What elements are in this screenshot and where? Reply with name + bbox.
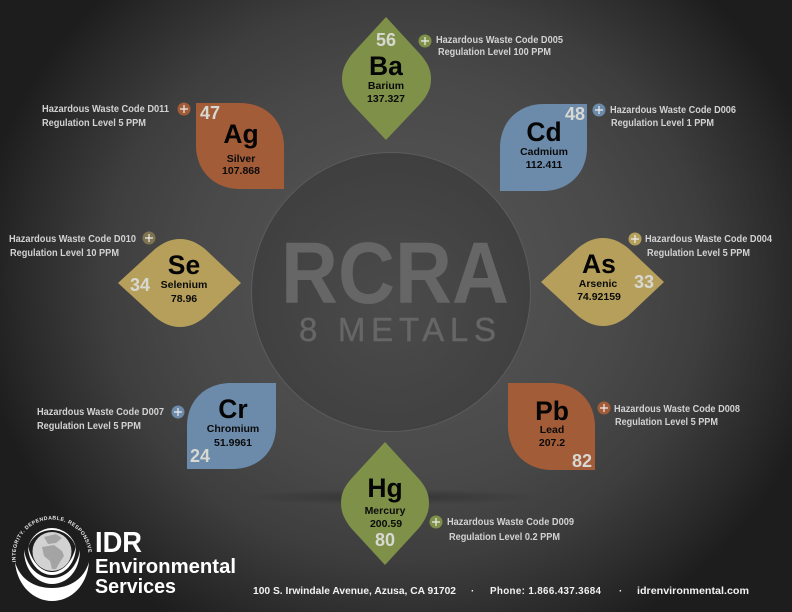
callout: Selenium regulation: Regulation Level 10 PPM bbox=[10, 248, 119, 259]
callout: Barium regulation: Hazardous Waste Code D005 bbox=[436, 35, 563, 46]
element: Silver: Ag bbox=[223, 119, 259, 149]
callout: Barium regulation bbox=[418, 34, 563, 58]
element: Chromium: Cr bbox=[218, 394, 248, 424]
callout: Lead regulation: Hazardous Waste Code D008 bbox=[614, 404, 740, 415]
callout: Cadmium regulation bbox=[592, 104, 736, 129]
element: Lead: Lead bbox=[540, 424, 564, 436]
element: Mercury bbox=[341, 442, 429, 565]
logo wordmark: Environmental bbox=[95, 556, 236, 578]
callout: Chromium regulation bbox=[37, 406, 184, 432]
callout: Silver regulation: Regulation Level 5 PPM bbox=[42, 118, 146, 129]
element: Lead: 207.2 bbox=[539, 437, 565, 449]
element: Lead: Pb bbox=[535, 396, 569, 426]
element: Mercury: Hg bbox=[367, 473, 403, 503]
element: Arsenic: 33 bbox=[634, 272, 654, 292]
callout: Mercury regulation: Hazardous Waste Code D009 bbox=[447, 517, 574, 528]
element: Barium: Barium bbox=[368, 80, 404, 92]
element: Chromium: Chromium bbox=[207, 423, 259, 435]
central circle: RCRA 8 Metals bbox=[252, 152, 530, 432]
callout: Arsenic regulation: Regulation Level 5 PPM bbox=[647, 248, 750, 259]
element: Cadmium: Cadmium bbox=[520, 146, 568, 158]
callout: Arsenic regulation bbox=[628, 232, 772, 259]
callout: Silver regulation bbox=[42, 102, 190, 129]
element: Mercury: Mercury bbox=[365, 505, 406, 517]
logo: IDR Environmental Services bbox=[12, 516, 236, 601]
element: Barium: 137.327 bbox=[367, 93, 405, 105]
element: Mercury: 80 bbox=[375, 530, 395, 550]
footer contact line: 100 S. Irwindale Avenue, Azusa, CA 91702 bbox=[253, 586, 457, 597]
element: Selenium: 34 bbox=[130, 275, 150, 295]
element: Cadmium: 48 bbox=[565, 104, 585, 124]
footer contact line: idrenvironmental.com bbox=[637, 586, 749, 597]
footer contact line: · bbox=[619, 586, 622, 597]
callout: Lead regulation: Regulation Level 5 PPM bbox=[615, 417, 718, 428]
element: Barium: Ba bbox=[369, 51, 403, 81]
footer contact line: Phone: 1.866.437.3684 bbox=[490, 586, 602, 597]
callout: Cadmium regulation: Regulation Level 1 PPM bbox=[611, 118, 714, 129]
element: Chromium: 51.9961 bbox=[214, 437, 252, 449]
element: Silver bbox=[196, 103, 284, 189]
element: Silver: 107.868 bbox=[222, 165, 260, 177]
callout: Mercury regulation: Regulation Level 0.2 PPM bbox=[449, 532, 560, 543]
element: Arsenic: Arsenic bbox=[579, 278, 617, 290]
element: Selenium: 78.96 bbox=[171, 293, 197, 305]
element: Chromium bbox=[187, 383, 276, 469]
ground shadow bbox=[241, 489, 541, 505]
element: Arsenic bbox=[541, 238, 664, 326]
icon: globe with rings: INTEGRITY. DEPENDABLE. RESPONSIVE bbox=[12, 516, 92, 562]
title: RCRA: RCRA bbox=[281, 225, 509, 322]
element: Mercury: 200.59 bbox=[370, 518, 402, 530]
subtitle: 8 METALS: 8 METALS bbox=[299, 311, 496, 348]
element: Selenium: Selenium bbox=[161, 279, 207, 291]
element: Arsenic: As bbox=[582, 249, 616, 279]
callout: Chromium regulation: Regulation Level 5 PPM bbox=[37, 421, 141, 432]
logo wordmark: IDR bbox=[95, 527, 142, 559]
element: Cadmium: Cd bbox=[526, 117, 562, 147]
element: Silver: Silver bbox=[227, 153, 255, 165]
element: Selenium: Se bbox=[168, 250, 200, 280]
callout: Selenium regulation bbox=[9, 232, 156, 259]
element: Barium bbox=[342, 17, 431, 140]
element: Cadmium bbox=[500, 104, 587, 191]
callout: Lead regulation bbox=[598, 402, 740, 428]
logo wordmark: Services bbox=[95, 576, 176, 598]
icon: globe with rings bbox=[12, 516, 92, 601]
footer contact line: · bbox=[471, 586, 474, 597]
callout: Arsenic regulation: Hazardous Waste Code D004 bbox=[645, 234, 772, 245]
callout: Selenium regulation: Hazardous Waste Code D010 bbox=[9, 234, 136, 245]
callout: Barium regulation: Regulation Level 100 PPM bbox=[438, 47, 551, 58]
element: Arsenic: 74.92159 bbox=[577, 291, 621, 303]
element: Chromium: 24 bbox=[190, 446, 210, 466]
footer contact line bbox=[253, 586, 749, 597]
logo wordmark bbox=[95, 527, 236, 598]
element: Lead bbox=[508, 383, 595, 471]
callout: Mercury regulation bbox=[430, 516, 574, 543]
callout: Chromium regulation: Hazardous Waste Code D007 bbox=[37, 407, 164, 418]
element: Selenium bbox=[118, 239, 241, 327]
element: Cadmium: 112.411 bbox=[526, 159, 563, 171]
callout: Silver regulation: Hazardous Waste Code D011 bbox=[42, 104, 169, 115]
element: Barium: 56 bbox=[376, 30, 396, 50]
element: Silver: 47 bbox=[200, 103, 220, 123]
callout: Cadmium regulation: Hazardous Waste Code D006 bbox=[610, 105, 736, 116]
element: Lead: 82 bbox=[572, 451, 592, 471]
